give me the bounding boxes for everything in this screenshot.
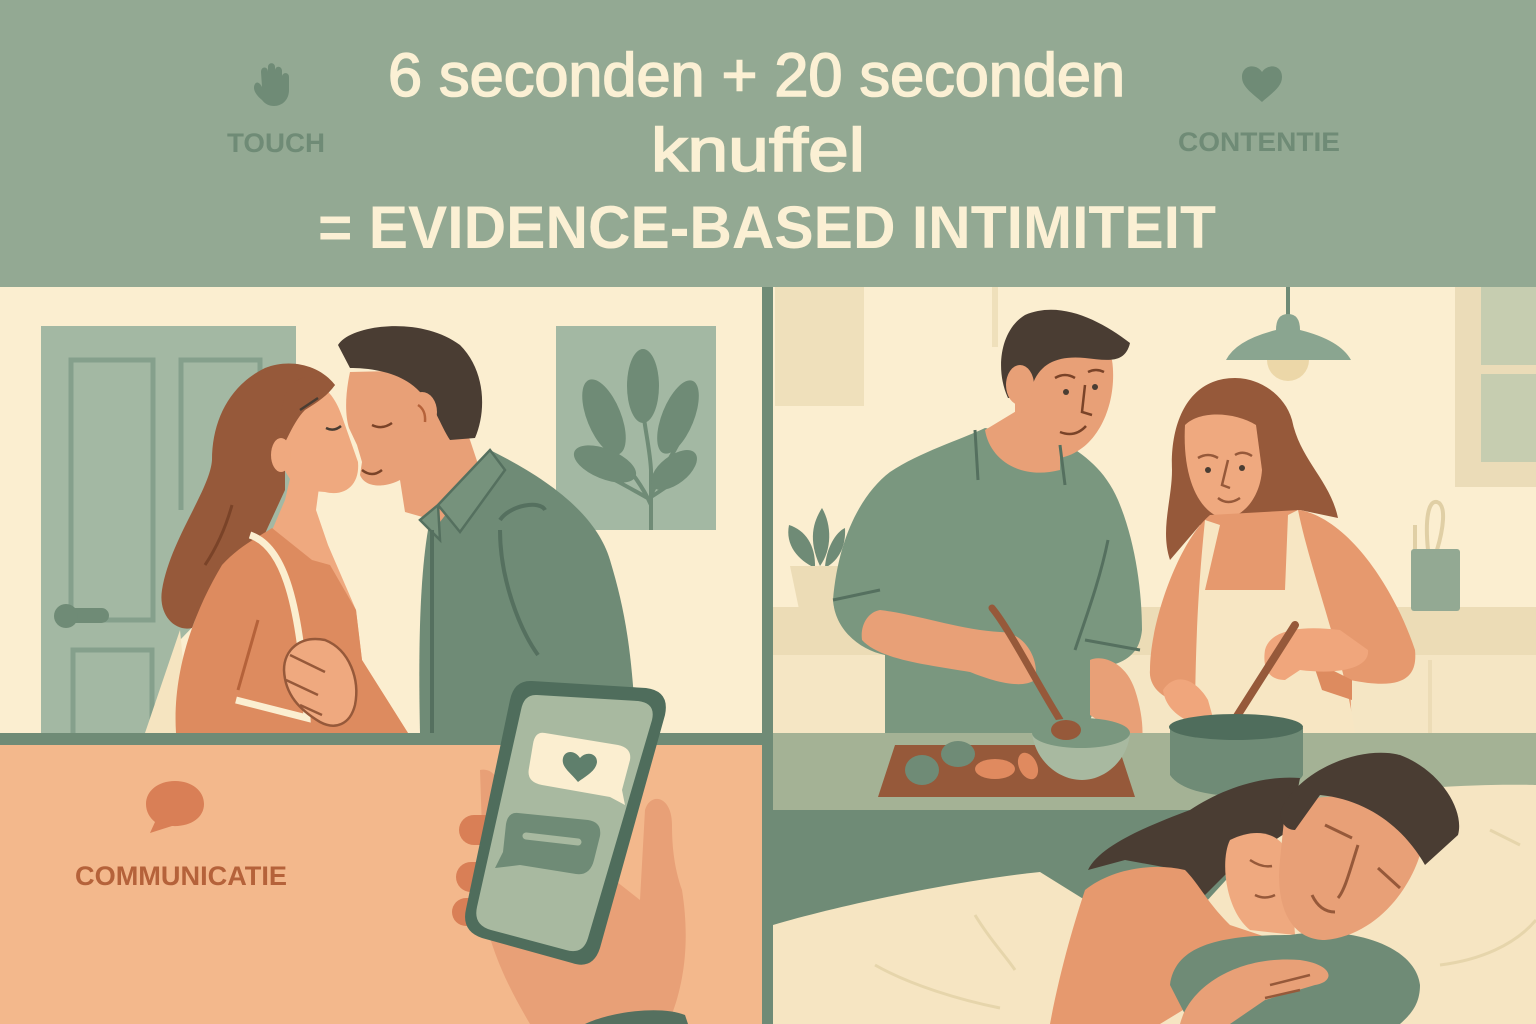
face [279, 385, 358, 493]
woman sleeping [1050, 778, 1300, 1024]
label: contentie: CONTENTIE [1178, 127, 1340, 157]
man kissing [338, 326, 636, 733]
title: = EVIDENCE-BASED INTIMITEIT [318, 194, 1216, 261]
neck and chest [176, 470, 408, 733]
woman kissing [145, 363, 408, 733]
mixing bowl [1032, 718, 1130, 780]
panel: kitchen scene [773, 287, 1536, 1024]
hand [284, 639, 356, 726]
message: heart [529, 733, 630, 805]
divider [762, 287, 773, 1024]
top [176, 528, 408, 733]
utensil jar [1411, 502, 1460, 611]
phone [465, 681, 666, 965]
cooking pot [1169, 714, 1303, 796]
panel: kiss scene [0, 287, 762, 733]
header band [0, 0, 1536, 287]
title [318, 41, 1216, 261]
icon: heart [1242, 66, 1282, 102]
icon: hand [254, 63, 289, 106]
icon: speech bubble [146, 781, 204, 833]
kitchen counter [773, 733, 1536, 810]
man cooking [833, 310, 1142, 760]
label: communicatie: COMMUNICATIE [75, 861, 287, 891]
panel: communication [0, 681, 762, 1024]
door [41, 326, 296, 733]
label: touch: TOUCH [227, 128, 325, 158]
title: 6 seconden + 20 seconden [388, 41, 1125, 109]
title: knuffel [651, 116, 865, 184]
bag strap [236, 535, 307, 718]
hair back [161, 363, 335, 629]
message: text [495, 813, 600, 874]
window [1455, 287, 1536, 487]
potted plant [788, 508, 845, 614]
man sleeping [1170, 753, 1459, 1024]
panel: sleeping scene [773, 753, 1536, 1024]
lamp [1226, 287, 1351, 381]
woman cooking [1150, 378, 1415, 735]
hand holding phone [452, 770, 688, 1024]
wall art: plant [556, 326, 716, 530]
cutting board [878, 741, 1135, 797]
